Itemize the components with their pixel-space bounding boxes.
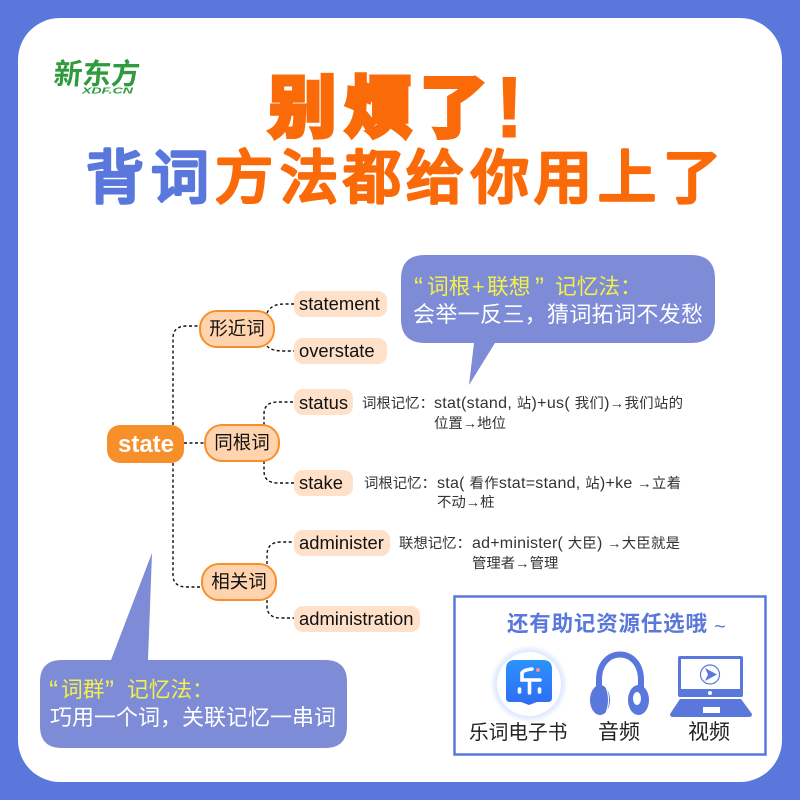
callout: 词根+联想: 记忆法 bbox=[555, 274, 620, 299]
callout: 词群: ” bbox=[105, 675, 114, 705]
note: status: 位置→地位 bbox=[434, 415, 506, 432]
title line 1: ! bbox=[495, 60, 524, 156]
leaf: overstate bbox=[294, 338, 387, 364]
note: stake bbox=[364, 475, 681, 511]
note: status bbox=[362, 395, 683, 432]
logo: 新东方 bbox=[52, 58, 141, 91]
branch node: 形近词 bbox=[200, 311, 274, 347]
label: 音频: 音频 bbox=[598, 721, 640, 744]
icon: 乐词 app bbox=[490, 645, 568, 723]
leaf: administration: administration bbox=[299, 608, 413, 629]
icon: headphones bbox=[590, 654, 649, 715]
leaf: overstate: overstate bbox=[299, 340, 375, 361]
resources heading: 还有助记资源任选哦 bbox=[507, 612, 707, 636]
callout: 词根+联想: 会举一反三，猜词拓词不发愁 bbox=[413, 302, 703, 327]
logo: XDF.CN bbox=[80, 86, 134, 96]
mind map connectors bbox=[173, 304, 294, 618]
title line 1: 别烦了 bbox=[269, 71, 487, 146]
leaf: stake bbox=[294, 470, 353, 496]
callout: 词根+联想: ： bbox=[620, 274, 642, 299]
root node: state: state bbox=[118, 431, 174, 458]
note: stake: 不动→桩 bbox=[437, 494, 495, 511]
note: status: stat(stand, 站)+us( 我们)→我们站的 bbox=[434, 395, 683, 412]
title bbox=[86, 60, 721, 211]
note: stake: 词根记忆： bbox=[364, 475, 436, 492]
callout: 词根+联想: 词根 bbox=[427, 274, 470, 299]
callout: 词根+联想 bbox=[401, 255, 715, 385]
note: stake: sta( 看作stat=stand, 站)+ke →立着 bbox=[437, 475, 681, 492]
callout: 词群: 记忆法 bbox=[127, 677, 192, 702]
title line 2: 背词 bbox=[86, 146, 209, 211]
callout: 词群: “ bbox=[49, 675, 58, 705]
resources heading: ~ bbox=[714, 616, 726, 638]
callout: 词群: ： bbox=[192, 677, 214, 702]
callout: 词根+联想: ” bbox=[535, 272, 544, 302]
branch node: 同根词 bbox=[205, 425, 279, 461]
label: 视频: 视频 bbox=[688, 721, 730, 744]
root node: state bbox=[107, 425, 184, 463]
leaf: status bbox=[294, 389, 353, 415]
note: administer bbox=[399, 535, 680, 572]
callout: 词群: 巧用一个词，关联记忆一串词 bbox=[50, 705, 336, 730]
title line 1 bbox=[269, 60, 524, 156]
callout: 词根+联想: “ bbox=[414, 272, 423, 302]
note: administer: 管理者→管理 bbox=[472, 555, 558, 572]
note: status: 词根记忆： bbox=[362, 395, 434, 412]
label: 乐词电子书: 乐词电子书 bbox=[469, 722, 567, 744]
note: administer: 联想记忆： bbox=[399, 535, 471, 552]
callout: 词群 bbox=[40, 553, 347, 748]
title line 2: 方法都给你用上了 bbox=[215, 146, 721, 211]
branch node: 相关词: 相关词 bbox=[211, 571, 267, 592]
callout: 词群: 词群 bbox=[61, 677, 104, 702]
branch node: 相关词 bbox=[202, 564, 276, 600]
icon: laptop bbox=[670, 656, 752, 717]
panel: resources bbox=[454, 596, 766, 754]
leaf: stake: stake bbox=[299, 472, 343, 493]
leaf: administer: administer bbox=[299, 532, 384, 553]
branch node: 同根词: 同根词 bbox=[214, 432, 270, 453]
callout: 词根+联想: + bbox=[472, 274, 485, 299]
callout: 词根+联想: 联想 bbox=[487, 274, 530, 299]
branch node: 形近词: 形近词 bbox=[209, 318, 265, 339]
leaf: statement: statement bbox=[299, 293, 380, 314]
note: administer: ad+minister( 大臣) →大臣就是 bbox=[472, 535, 680, 552]
leaf: status: status bbox=[299, 392, 348, 413]
